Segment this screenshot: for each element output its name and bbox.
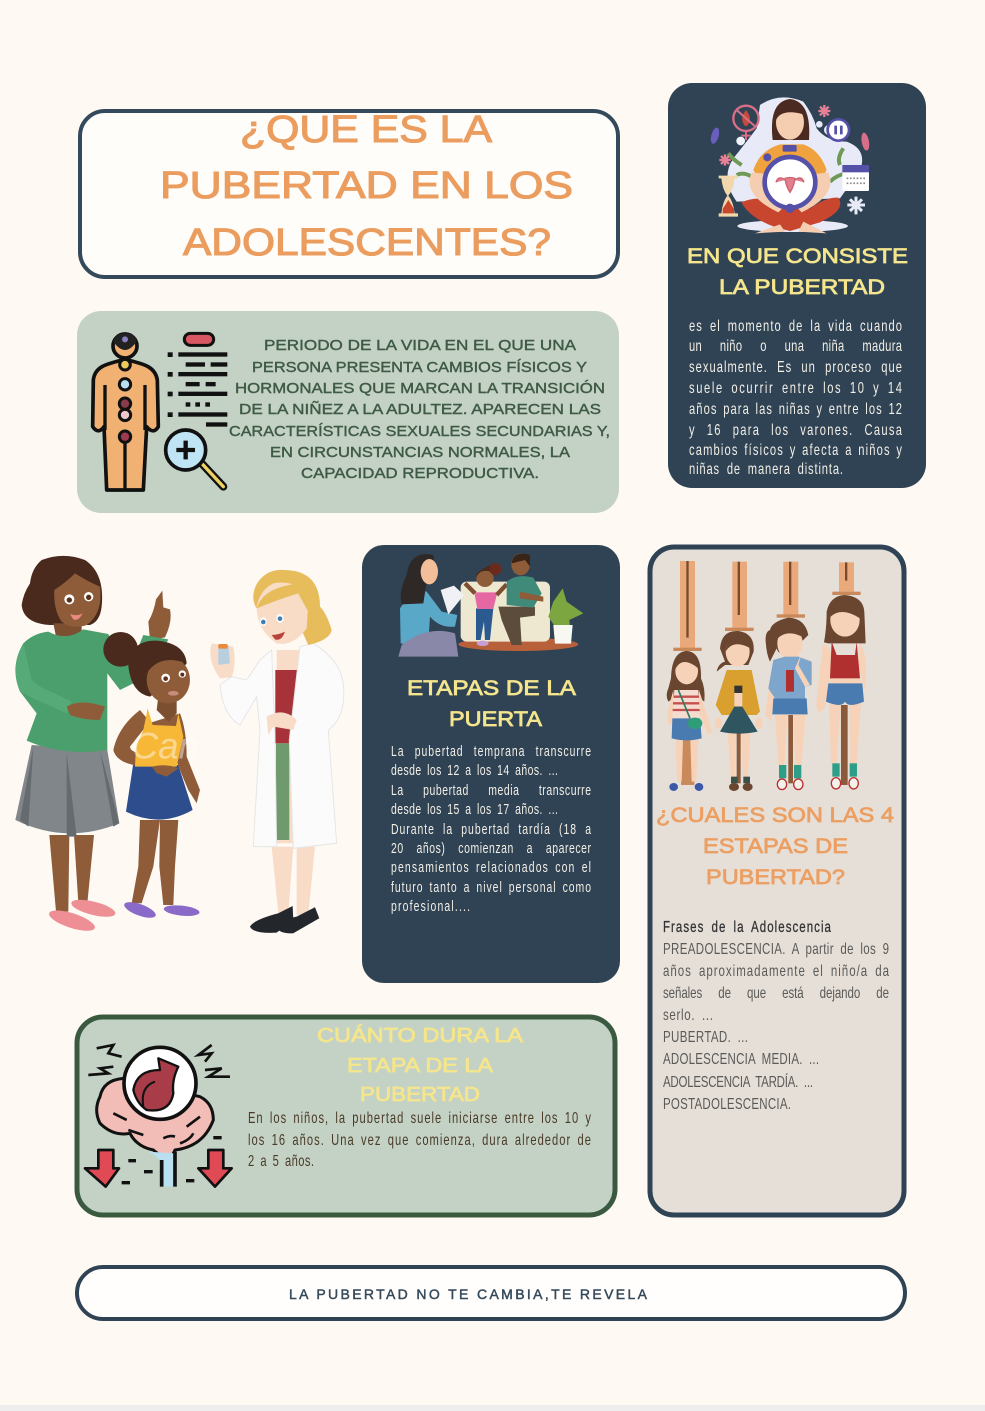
- footer text: LA PUBERTAD NO TE CAMBIA,TE REVELA: [289, 1286, 648, 1302]
- heading: [317, 1024, 524, 1106]
- body text: niñas de manera distinta.: [689, 460, 843, 477]
- body text: profesional....: [391, 898, 470, 914]
- title text: ADOLESCENTES?: [183, 222, 551, 264]
- definition text: CARACTERÍSTICAS SEXUALES SECUNDARIAS Y,: [229, 423, 610, 440]
- body text: desde los 12 a los 14 años. ...: [391, 762, 558, 778]
- body text: sexualmente. Es un proceso que: [689, 358, 902, 375]
- daughter: [103, 632, 200, 921]
- icon: brain with gland: [85, 1045, 232, 1187]
- panel: cuales son las 4 estapas: [650, 547, 904, 1215]
- heading: ESTAPAS DE: [703, 835, 848, 858]
- heading: [407, 677, 576, 731]
- body text: 20 años) comienzan a aparecer: [391, 840, 591, 856]
- body text: La pubertad temprana transcurre: [391, 743, 591, 759]
- panel: definition: [77, 311, 619, 513]
- girl 4: [816, 562, 866, 789]
- heading: PUERTA: [449, 708, 542, 731]
- illustration: mother, daughter and doctor: [15, 556, 344, 935]
- title text: ¿QUE ES LA: [240, 109, 493, 151]
- body text: [663, 917, 889, 1112]
- body text: cambios físicos y afecta a niños y: [689, 441, 902, 458]
- body text: un niño o una niña madura: [689, 337, 902, 354]
- body text: La pubertad media transcurre: [391, 782, 591, 798]
- icon: human body with magnifier: [93, 333, 227, 490]
- body text: años aproximadamente el niño/a da: [663, 961, 889, 979]
- illustration: woman with clock: [709, 97, 870, 233]
- heading: EN QUE CONSISTE: [687, 245, 908, 268]
- body text: años para las niñas y entre los 12: [689, 400, 902, 417]
- footer pill: [77, 1267, 905, 1319]
- definition text: CAPACIDAD REPRODUCTIVA.: [301, 465, 539, 482]
- panel: cuanto dura: [77, 1017, 615, 1215]
- heading: ETAPA DE LA: [347, 1055, 494, 1077]
- body text: y 16 para los varones. Causa: [689, 421, 902, 438]
- body text: ADOLESCENCIA MEDIA. ...: [663, 1049, 819, 1067]
- heading: CUÁNTO DURA LA: [317, 1024, 524, 1047]
- definition text: EN CIRCUNSTANCIAS NORMALES, LA: [270, 444, 570, 461]
- panel: etapas de la puerta: [362, 545, 620, 983]
- body text: ADOLESCENCIA TARDÍA. ...: [663, 1072, 813, 1090]
- body text: 2 a 5 años.: [248, 1152, 314, 1169]
- body text: [248, 1109, 591, 1169]
- body text: PUBERTAD. ...: [663, 1027, 748, 1045]
- heading: LA PUBERTAD: [719, 276, 885, 299]
- definition text: HORMONALES QUE MARCAN LA TRANSICIÓN: [235, 380, 605, 397]
- heading: [656, 804, 894, 889]
- heading: ETAPAS DE LA: [407, 677, 576, 700]
- heading: ¿CUALES SON LAS 4: [656, 804, 894, 827]
- definition text: DE LA NIÑEZ A LA ADULTEZ. APARECEN LAS: [239, 401, 601, 418]
- illustration: four girls with height rulers: [667, 561, 866, 791]
- definition text: PERIODO DE LA VIDA EN EL QUE UNA: [264, 337, 576, 354]
- body text: es el momento de la vida cuando: [689, 317, 902, 334]
- heading: PUBERTAD?: [706, 866, 845, 889]
- body text: [391, 743, 592, 914]
- body text: señales de que está dejando de: [663, 983, 889, 1001]
- girl 3: [765, 562, 812, 790]
- title text: PUBERTAD EN LOS: [160, 165, 573, 207]
- body text: desde los 15 a los 17 años. ...: [391, 801, 558, 817]
- body text: los 16 años. Una vez que comienza, dura alrededor de: [248, 1131, 591, 1148]
- body text: serlo. ...: [663, 1005, 713, 1023]
- girl 2: [715, 562, 763, 791]
- title text: [160, 109, 573, 264]
- body text: En los niños, la pubertad suele iniciarse entre los 10 y: [248, 1109, 591, 1126]
- mother: [15, 556, 171, 935]
- girl 1: [667, 561, 712, 791]
- panel: en que consiste: [668, 83, 926, 488]
- illustration: family with therapist: [398, 553, 583, 657]
- body text: Frases de la Adolescencia: [663, 917, 831, 935]
- definition text: PERSONA PRESENTA CAMBIOS FÍSICOS Y: [252, 359, 587, 376]
- body text: futuro tanto a nivel personal como: [391, 879, 591, 895]
- body text: suele ocurrir entre los 10 y 14: [689, 379, 902, 396]
- body text: Durante la pubertad tardía (18 a: [391, 821, 592, 837]
- heading: [687, 245, 908, 299]
- doctor: [210, 570, 344, 933]
- body text: PREADOLESCENCIA. A partir de los 9: [663, 939, 889, 957]
- title box: [80, 109, 618, 277]
- body text: pensamientos relacionados con el: [391, 859, 591, 875]
- body text: POSTADOLESCENCIA.: [663, 1094, 791, 1112]
- body text: [689, 317, 902, 477]
- definition text: [229, 337, 610, 482]
- watermark: Can: [132, 725, 199, 766]
- heading: PUBERTAD: [360, 1084, 480, 1106]
